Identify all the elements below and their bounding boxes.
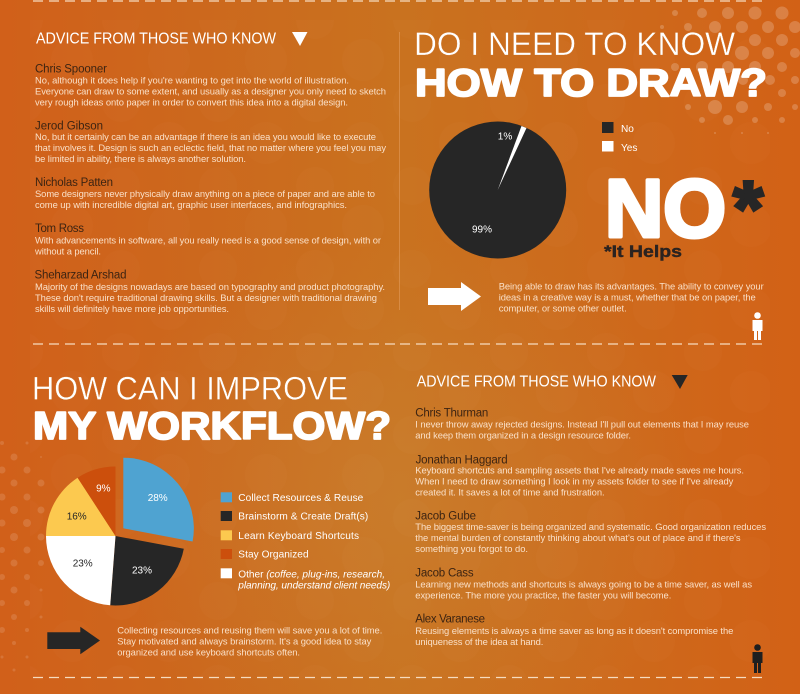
pie chart: workflow shares: 28% bbox=[148, 493, 168, 504]
pie chart: workflow shares: 16% bbox=[67, 512, 87, 522]
text block: drawing advantages: ideas in a creative way is a must, whether that be on paper, the bbox=[499, 292, 756, 302]
quote: Jonathan Haggard: Keyboard shortcuts and sampling assets that I've already made saves me hours. bbox=[415, 464, 744, 475]
legend: no and yes: Yes bbox=[621, 143, 637, 154]
legend: no and yes: No bbox=[621, 124, 634, 135]
quote: Nicholas Patten bbox=[35, 177, 375, 210]
quote: Alex Varanese bbox=[415, 614, 733, 647]
quote: Chris Thurman bbox=[415, 408, 749, 440]
big answer: NO with asterisk: NO bbox=[605, 164, 726, 254]
arrow: dark pointing right bbox=[47, 627, 100, 654]
title: how can I improve my workflow: HOW CAN I IMPROVE bbox=[32, 370, 348, 406]
text block: workflow summary: Collecting resources and reusing them will save you a lot of time. bbox=[117, 625, 382, 636]
panel: how can I improve my workflow bbox=[32, 370, 391, 658]
legend: workflow categories: Collect Resources & Reuse bbox=[238, 493, 364, 504]
title: do I need to know how to draw bbox=[414, 26, 767, 105]
pie chart: workflow shares bbox=[46, 458, 194, 606]
quote: Chris Spooner: No, although it does help if you're wanting to get into the world of illustration. bbox=[35, 74, 349, 86]
quote: Sheharzad Arshad bbox=[34, 270, 385, 314]
quote: Nicholas Patten: come up with incredible digital art, graphic user interfaces, and infographics. bbox=[35, 199, 347, 210]
title: how can I improve my workflow bbox=[32, 370, 391, 448]
quote: Chris Spooner: Chris Spooner bbox=[35, 64, 107, 76]
quote: Jonathan Haggard: When I need to draw something I look in my assets folder to see if I've already bbox=[415, 475, 734, 486]
icon: dark down triangle bbox=[672, 375, 688, 389]
legend: workflow categories: Stay Organized bbox=[238, 550, 309, 561]
title: do I need to know how to draw: HOW TO DRAW? bbox=[415, 62, 767, 105]
quote: Chris Spooner: Everyone can draw to some extent, and usually as a designer you only need to sketch bbox=[35, 86, 386, 96]
quote: Jacob Cass: Learning new methods and shortcuts is always going to be a time saver, as well as bbox=[415, 579, 752, 590]
heading: advice from those who know: ADVICE FROM THOSE WHO KNOW bbox=[417, 374, 656, 391]
pie chart: workflow shares: 9% bbox=[96, 484, 111, 494]
text block: workflow summary: organized and use keyboard shortcuts often. bbox=[117, 647, 300, 658]
icon: white down triangle bbox=[292, 32, 308, 46]
quote: Nicholas Patten: Nicholas Patten bbox=[35, 177, 113, 189]
quote: Chris Thurman: I never throw away rejected designs. Instead I'll pull out elements that I may reuse bbox=[415, 418, 749, 429]
quote: Jonathan Haggard: created it. It saves a lot of time and frustration. bbox=[415, 486, 605, 497]
quote: Alex Varanese: Alex Varanese bbox=[415, 614, 485, 626]
quote: Jacob Cass: experience. The more you practice, the faster you will become. bbox=[415, 590, 671, 601]
quote: Jacob Cass: Jacob Cass bbox=[415, 567, 474, 579]
quote: Jacob Gube: something you forgot to do. bbox=[415, 543, 528, 554]
icon: white person bbox=[752, 312, 762, 340]
text block: drawing advantages: computer, or some other outlet. bbox=[499, 302, 627, 314]
panel: advice on drawing bbox=[34, 30, 386, 314]
quote: Tom Ross: without a pencil. bbox=[34, 246, 101, 256]
quote: Jacob Gube: the mental burden of constantly thinking about what's out of place and if there's bbox=[415, 532, 741, 543]
legend: workflow categories: Other (coffee, plug-ins, research, bbox=[238, 569, 385, 580]
quote: Jerod Gibson: No, but it certainly can be an advantage if there is an idea you would like to execute bbox=[35, 131, 376, 142]
quote: Sheharzad Arshad: These don't require traditional drawing skills. But a designer with traditional drawing bbox=[35, 292, 377, 303]
quote: Sheharzad Arshad: Majority of the designs nowadays are based on typography and product photography. bbox=[35, 281, 385, 292]
quote: Jacob Cass bbox=[415, 567, 752, 601]
quote: Nicholas Patten: Some designers never physically draw anything on a piece of paper and are able to bbox=[35, 188, 375, 199]
quote: Jonathan Haggard bbox=[415, 454, 744, 497]
text block: drawing advantages: Being able to draw has its advantages. The ability to convey your bbox=[499, 280, 764, 292]
quote: Jerod Gibson: be limited in ability, there is always another solution. bbox=[35, 153, 246, 164]
pie chart: workflow shares: 23% bbox=[73, 558, 93, 570]
quote: Alex Varanese: Reusing elements is always a time saver as long as it doesn't compromise the bbox=[415, 625, 733, 636]
big answer: NO with asterisk: *It Helps bbox=[604, 243, 682, 261]
legend: workflow categories: Learn Keyboard Shortcuts bbox=[238, 531, 359, 542]
quote: Sheharzad Arshad: Sheharzad Arshad bbox=[34, 270, 126, 282]
quote: Chris Spooner bbox=[35, 64, 386, 108]
quote: Alex Varanese: uniqueness of the idea at hand. bbox=[415, 636, 543, 647]
big answer: NO with asterisk: * bbox=[733, 164, 764, 252]
quote: Tom Ross: With advancements in software, all you really need is a good sense of design, with or bbox=[35, 234, 381, 246]
legend: workflow categories: planning, understand client needs) bbox=[237, 581, 390, 592]
legend: workflow categories bbox=[221, 492, 390, 592]
quote: Jerod Gibson bbox=[35, 120, 386, 164]
text block: workflow summary: Stay motivated and always brainstorm. It's a good idea to stay bbox=[117, 636, 372, 647]
heading: advice from those who know: ADVICE FROM THOSE WHO KNOW bbox=[36, 30, 276, 48]
quote: Chris Thurman: and keep them organized in a design resource folder. bbox=[415, 429, 631, 440]
arrow: white pointing right bbox=[428, 282, 481, 311]
quote: Chris Thurman: Chris Thurman bbox=[415, 408, 488, 420]
text block: workflow summary bbox=[117, 625, 382, 658]
legend: no and yes bbox=[602, 122, 637, 154]
pie chart: no 99 percent, yes 1 percent: 99% bbox=[472, 224, 492, 236]
panel: do I need to know how to draw bbox=[414, 26, 767, 340]
quote: Sheharzad Arshad: skills will definitely have more job opportunities. bbox=[35, 303, 229, 314]
icon: dark person bbox=[752, 644, 762, 673]
title: do I need to know how to draw: DO I NEED TO KNOW bbox=[414, 26, 736, 62]
quote: Jacob Gube: Jacob Gube bbox=[415, 511, 476, 523]
quote: Tom Ross: Tom Ross bbox=[35, 223, 84, 235]
pie chart: no 99 percent, yes 1 percent bbox=[429, 122, 566, 258]
title: how can I improve my workflow: MY WORKFLOW? bbox=[33, 405, 391, 448]
quote: Jonathan Haggard: Jonathan Haggard bbox=[416, 454, 508, 466]
quote: Jerod Gibson: Jerod Gibson bbox=[35, 120, 103, 132]
pie chart: no 99 percent, yes 1 percent: 1% bbox=[498, 132, 512, 142]
quote: Jacob Gube bbox=[415, 511, 766, 554]
quote: Jacob Gube: The biggest time-saver is being organized and systematic. Good organization reduces bbox=[415, 521, 766, 532]
panel: advice on workflow bbox=[415, 374, 766, 673]
pie chart: workflow shares: 23% bbox=[132, 566, 152, 576]
quote: Tom Ross bbox=[34, 223, 381, 256]
legend: workflow categories: Brainstorm & Create Draft(s) bbox=[238, 512, 368, 523]
quote: Jerod Gibson: that involves it. Design is such an eclectic field, that no matter where you feel you may bbox=[35, 142, 386, 153]
quote: Chris Spooner: very rough ideas onto paper in order to convert this idea into a digital design. bbox=[35, 96, 348, 108]
text block: drawing advantages bbox=[499, 280, 764, 314]
